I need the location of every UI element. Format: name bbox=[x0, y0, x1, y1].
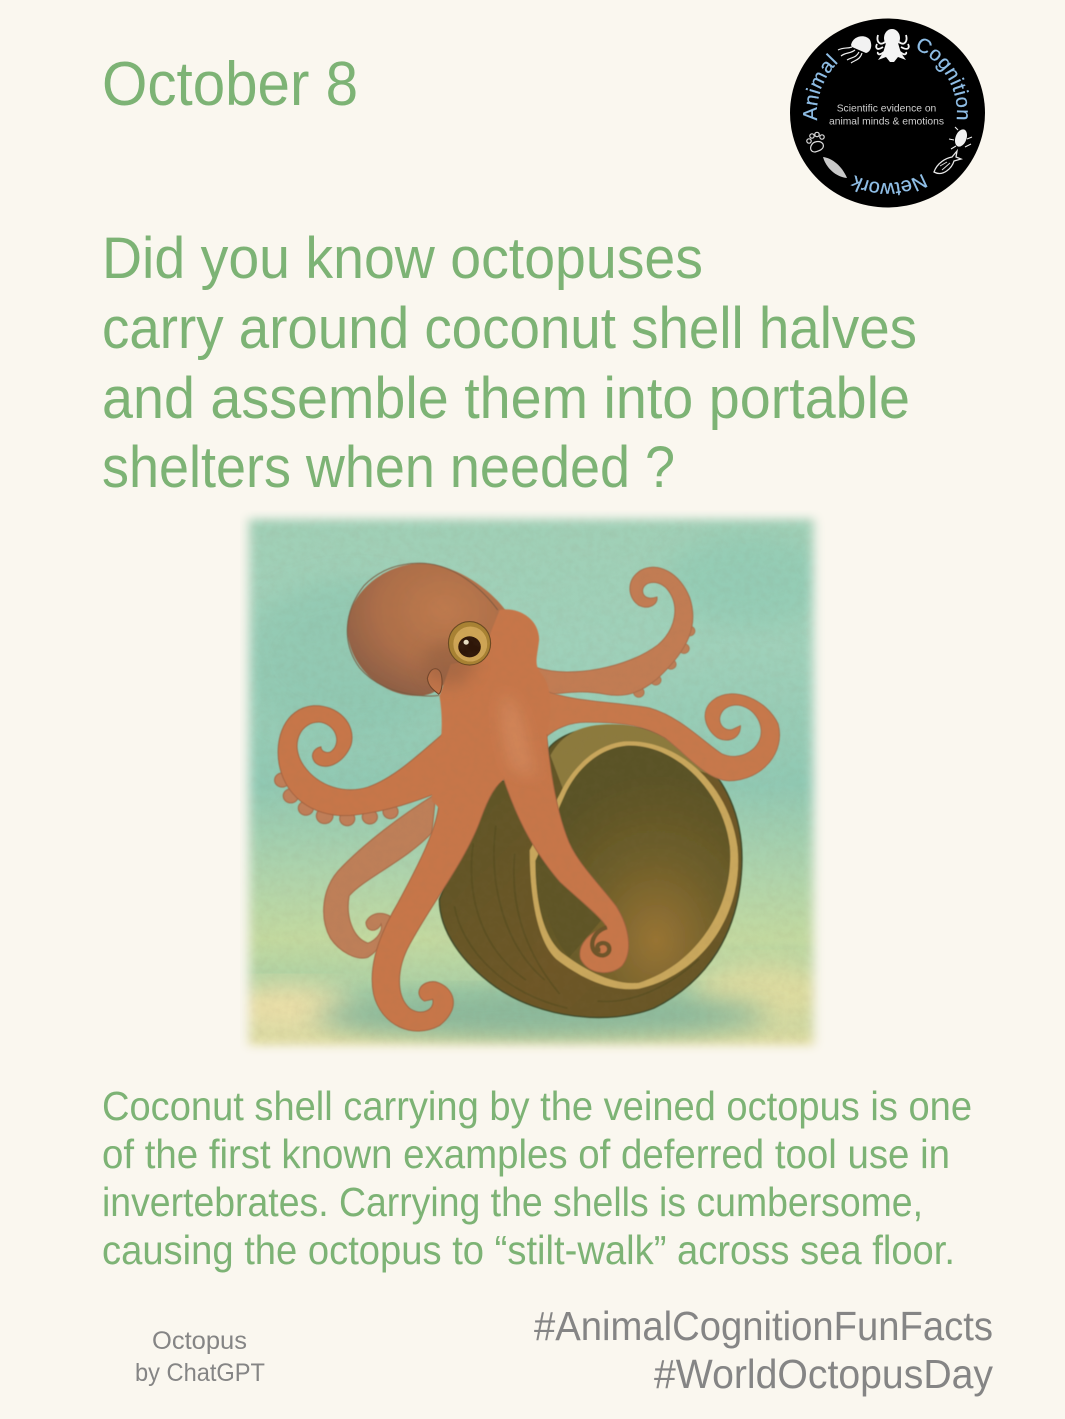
siphon bbox=[427, 669, 442, 694]
date heading: October 8 bbox=[102, 50, 358, 119]
coconut shell bbox=[439, 724, 742, 1017]
logo tagline: animal minds & emotions bbox=[829, 116, 944, 128]
shell lower inner shade bbox=[560, 892, 600, 956]
octopus eye bbox=[448, 622, 491, 665]
image credit bbox=[135, 1327, 265, 1387]
icon: beetle bbox=[949, 127, 972, 149]
octopus front right arm bbox=[503, 720, 629, 973]
body paragraph: causing the octopus to “stilt-walk” across sea floor. bbox=[102, 1227, 955, 1273]
octopus left curled arm bbox=[275, 706, 451, 826]
arm curl spiral bbox=[592, 927, 609, 955]
hashtags: #WorldOctopusDay bbox=[654, 1351, 993, 1397]
suckers bbox=[634, 626, 695, 697]
logo ring wordmark: Cognition bbox=[918, 38, 969, 120]
octopus head bbox=[347, 563, 509, 696]
logo ring wordmark: Animal bbox=[803, 53, 838, 121]
hashtags bbox=[534, 1303, 993, 1397]
octopus lower-left arm bbox=[372, 756, 507, 1031]
shell outer husk bbox=[439, 726, 742, 1017]
logo tagline bbox=[829, 104, 944, 128]
watercolor background bbox=[217, 510, 842, 1060]
shell inner hollow bbox=[535, 746, 730, 983]
suckers bbox=[275, 773, 398, 826]
head outline bbox=[347, 563, 498, 696]
main question heading bbox=[102, 226, 917, 500]
shell rim bbox=[530, 741, 738, 989]
body highlight bbox=[502, 704, 532, 771]
octopus body bbox=[432, 608, 549, 808]
icon: paw bbox=[807, 132, 824, 152]
shell fibre lines bbox=[454, 826, 699, 1008]
logo badge: Animal Cognition Network bbox=[790, 18, 985, 208]
shell upper rim bbox=[550, 724, 707, 791]
logo ring wordmark: Network bbox=[850, 174, 928, 196]
image credit: by ChatGPT bbox=[135, 1359, 265, 1387]
icon: octopus bbox=[876, 29, 909, 62]
icon: jellyfish bbox=[838, 36, 871, 63]
logo tagline: Scientific evidence on bbox=[837, 104, 937, 114]
main question heading: carry around coconut shell halves bbox=[102, 296, 917, 361]
icon: fish bbox=[934, 151, 961, 173]
main question heading: and assemble them into portable bbox=[102, 366, 910, 431]
image credit: Octopus bbox=[152, 1327, 247, 1355]
eye shadow bbox=[422, 643, 475, 685]
main question heading: shelters when needed ? bbox=[102, 435, 675, 500]
body paragraph: invertebrates. Carrying the shells is cumbersome, bbox=[102, 1179, 923, 1225]
octopus right arm across shell bbox=[533, 685, 780, 781]
body paragraph: Coconut shell carrying by the veined octopus is one bbox=[102, 1083, 972, 1129]
octopus upper right arm bbox=[533, 567, 695, 697]
octopus rear-left arm bbox=[324, 794, 436, 958]
body paragraph bbox=[102, 1083, 972, 1273]
illustration: octopus with coconut shell bbox=[242, 513, 821, 1051]
main question heading: Did you know octopuses bbox=[102, 226, 703, 291]
body paragraph: of the first known examples of deferred tool use in bbox=[102, 1131, 950, 1177]
icon: feather bbox=[823, 157, 847, 178]
hashtags: #AnimalCognitionFunFacts bbox=[534, 1303, 993, 1349]
paper grain bbox=[240, 510, 830, 1060]
logo ring wordmark bbox=[803, 38, 969, 196]
